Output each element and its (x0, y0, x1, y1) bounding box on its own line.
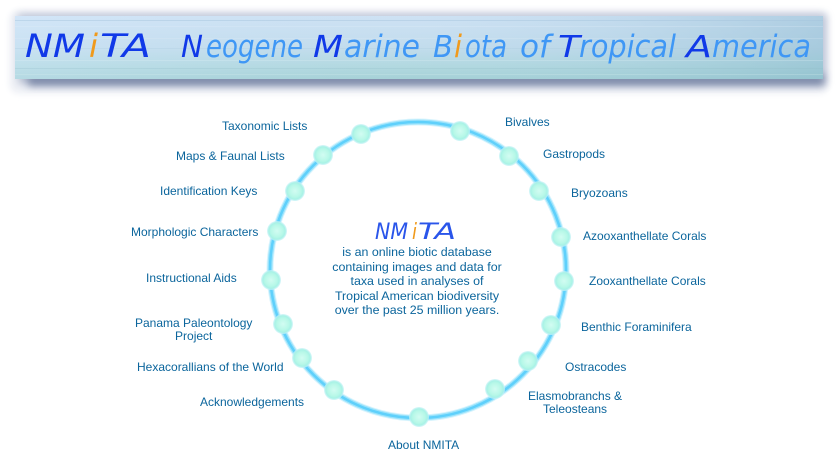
center logo: NM (375, 220, 408, 245)
banner title: NM (25, 27, 85, 65)
text: Instructional Aids (146, 271, 237, 285)
text: Morphologic Characters (131, 225, 258, 239)
right labels (505, 115, 706, 416)
center description: containing images and data for (332, 260, 502, 274)
banner title: A (683, 30, 712, 65)
center logo: TA (418, 220, 456, 245)
text: Elasmobranchs & (528, 389, 622, 403)
banner title: ropical (579, 29, 676, 65)
banner title: T (558, 30, 583, 65)
text: Gastropods (543, 147, 605, 161)
banner title: arine (344, 29, 420, 65)
banner title: i (89, 27, 98, 65)
banner title: M (313, 30, 343, 65)
text: Project (175, 329, 212, 343)
center description: is an online biotic database (342, 245, 492, 259)
text: Maps & Faunal Lists (176, 149, 285, 163)
banner title: B (433, 30, 453, 65)
text: Bryozoans (571, 186, 628, 200)
text: Azooxanthellate Corals (583, 229, 706, 243)
left labels (131, 119, 307, 409)
text: Zooxanthellate Corals (589, 274, 706, 288)
banner title: of (520, 29, 554, 65)
text: Acknowledgements (200, 395, 304, 409)
center description: taxa used in analyses of (351, 274, 483, 288)
center description: Tropical American biodiversity (335, 288, 499, 302)
header banner (9, 8, 832, 94)
text: Panama Paleontology (135, 316, 252, 330)
text: Ostracodes (565, 360, 626, 374)
text: Taxonomic Lists (222, 119, 307, 133)
center logo (375, 220, 456, 245)
banner title: ota (465, 29, 507, 65)
text: Teleosteans (543, 402, 607, 416)
bottom label: About NMITA (388, 438, 459, 452)
banner title: i (454, 29, 462, 65)
banner title: TA (100, 27, 151, 65)
center description: over the past 25 million years. (335, 303, 499, 317)
text: Identification Keys (160, 184, 257, 198)
center logo: i (412, 220, 417, 245)
banner title: merica (712, 29, 811, 65)
banner title (25, 27, 811, 65)
text: Bivalves (505, 115, 550, 129)
banner title: N (181, 30, 203, 65)
center description (332, 245, 502, 317)
text: Hexacorallians of the World (137, 360, 284, 374)
banner title: eogene (206, 29, 303, 65)
text: Benthic Foraminifera (581, 320, 692, 334)
